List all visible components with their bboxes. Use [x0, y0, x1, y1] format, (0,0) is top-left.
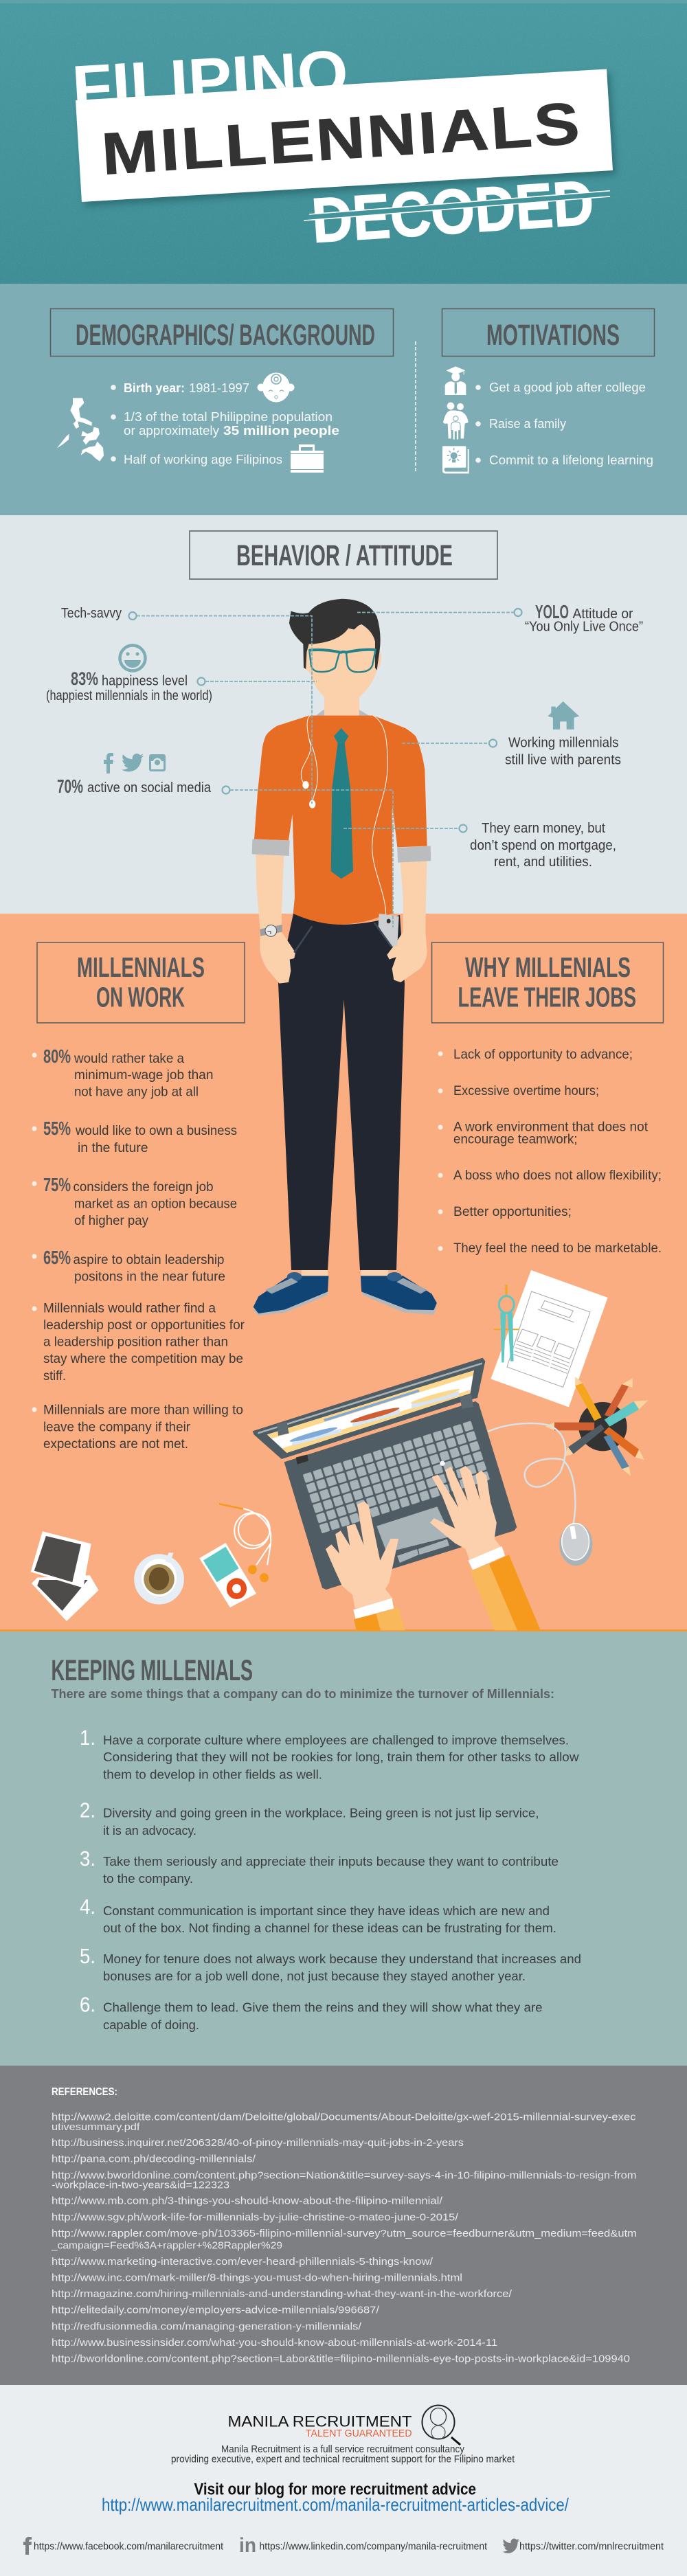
call to action: http://www.manilarecruitment.com/manila-recruitment-articles-advice/ — [102, 2494, 570, 2515]
social link: linkedin: in — [239, 2534, 256, 2557]
list: reasons for leaving: A boss who does not allow flexibility; — [453, 1168, 662, 1183]
icon: briefcase — [291, 444, 324, 473]
social link: facebook — [23, 2537, 223, 2555]
text: motivation 1: Get a good job after college — [489, 380, 646, 394]
heading: references: REFERENCES: — [52, 2086, 117, 2098]
list of reference links: http://www.mb.com.ph/3-things-you-should-know-about-the-filipino-millennial/ — [52, 2195, 443, 2206]
list: work statistic 65% — [32, 1247, 225, 1285]
list: work statistic 65%: 65% — [43, 1247, 71, 1268]
list: leadership post: stiff. — [43, 1368, 66, 1383]
heading: millennials on work — [37, 942, 245, 1023]
tip 1: Have a corporate culture where employees are challenged to improve themselves. — [103, 1732, 569, 1748]
title word: Filipino: FILIPINO — [70, 37, 350, 124]
text: happiness level: happiness level — [102, 673, 188, 688]
title banner — [76, 69, 616, 206]
list: leadership post: stay where the competition may be — [43, 1351, 243, 1366]
list: work statistic 80%: would rather take a — [74, 1051, 184, 1066]
text: earn money: They earn money, but — [482, 821, 605, 836]
logo: Manila Recruitment — [228, 2406, 460, 2445]
company description: Manila Recruitment is a full service recruitment consultancy — [221, 2444, 465, 2455]
neck, face and hair — [289, 599, 383, 742]
tip 4: 4. — [80, 1895, 95, 1919]
icon: Philippines map — [57, 398, 104, 462]
list of reference links: http://www.sgv.ph/work-life-for-millennials-by-julie-christine-o-mateo-june-0-2015/ — [52, 2212, 459, 2223]
laptop base — [277, 1394, 517, 1590]
pencil cup — [545, 1377, 649, 1476]
list: work statistic 55%: 55% — [43, 1118, 71, 1139]
right hand — [430, 1466, 541, 1630]
text: social media — [57, 776, 212, 797]
text: YOLO: YOLO — [535, 601, 569, 622]
tip 3: Take them seriously and appreciate their inputs because they want to contribute — [103, 1854, 559, 1868]
logo: Manila Recruitment: MANILA RECRUITMENT — [228, 2413, 412, 2430]
text: live with parents: Working millennials — [508, 735, 618, 750]
tip 4: Constant communication is important since they have ideas which are new and — [103, 1903, 550, 1918]
text: tech-savvy: Tech-savvy — [61, 606, 122, 621]
list: work statistic 75% — [32, 1174, 237, 1228]
tip 2: 2. — [80, 1798, 95, 1822]
list: reasons for leaving: encourage teamwork; — [453, 1132, 577, 1147]
callout leader lines — [129, 609, 522, 927]
list of reference links: _campaign=Feed%3A+rappler+%28Rappler%29 — [51, 2239, 282, 2252]
tip 2: it is an advocacy. — [103, 1823, 196, 1838]
heading: behavior — [190, 531, 497, 579]
list of reference links: http://elitedaily.com/money/employers-advice-millennials/996687/ — [52, 2304, 380, 2316]
arms, shirt, tie and accessories — [252, 716, 431, 984]
icon: book with light bulb — [442, 446, 469, 473]
tip 6: 6. — [80, 1992, 95, 2017]
text: happiness level — [46, 668, 212, 703]
left hand — [326, 1502, 405, 1630]
text: population — [111, 409, 339, 438]
text: population: 35 million people — [223, 423, 339, 438]
panel: millennials at work — [0, 914, 687, 1631]
list of reference links: http://www.businessinsider.com/what-you-should-know-about-millennials-at-work-2014-11 — [52, 2337, 497, 2349]
heading: millennials on work: MILLENNIALS — [77, 951, 205, 983]
shoes — [254, 1270, 437, 1315]
icons: social media — [104, 753, 166, 773]
icon: baby — [257, 372, 294, 403]
social link: facebook: https://www.facebook.com/manilarecruitment — [34, 2542, 223, 2553]
list: reasons for leaving — [438, 1047, 662, 1256]
list: work statistic 80% — [32, 1046, 213, 1099]
earphones — [301, 716, 387, 915]
text: happiness level: (happiest millennials in the world) — [46, 688, 212, 703]
list: work statistic 55%: in the future — [78, 1140, 148, 1155]
panel: title header — [0, 0, 687, 284]
list: leadership post: a leadership position rather than — [43, 1334, 228, 1349]
list: leadership post — [32, 1301, 245, 1383]
list of reference links: http://redfusionmedia.com/managing-generation-y-millennials/ — [52, 2320, 362, 2333]
call to action — [102, 2480, 570, 2515]
tip 4: out of the box. Not finding a channel for these ideas can be frustrating for them. — [103, 1921, 556, 1935]
list of reference links: utivesummary.pdf — [52, 2121, 140, 2133]
list of reference links: http://rmagazine.com/hiring-millennials-and-understanding-what-they-want-in-the-workforce/ — [52, 2288, 513, 2300]
heading: millennials on work: ON WORK — [96, 981, 185, 1013]
illustration: man — [252, 599, 437, 1315]
tip 5 — [80, 1944, 581, 1983]
tip 5: bonuses are for a job well done, not just because they stayed another year. — [103, 1969, 526, 1983]
icon: house — [548, 701, 579, 730]
list: reasons for leaving: Excessive overtime hours; — [453, 1083, 599, 1098]
list: work statistic 55% — [32, 1118, 237, 1155]
list of reference links: http://www.bworldonline.com/content.php?section=Nation&title=survey-says-4-in-10-filipino-millennials-to-resign-from — [52, 2169, 637, 2182]
text: live with parents: still live with parents — [505, 753, 621, 768]
text: YOLO: “You Only Live Once” — [525, 620, 643, 635]
list of reference links: http://www.rappler.com/move-ph/103365-filipino-millennial-survey?utm_source=feedburner&utm_medium=feed&utm — [52, 2228, 637, 2239]
list: reasons for leaving: Lack of opportunity to advance; — [453, 1047, 633, 1062]
tip 1: 1. — [80, 1726, 95, 1750]
panel: demographics and motivations — [0, 284, 687, 515]
list: work statistic 80%: minimum-wage job than — [74, 1067, 213, 1083]
list: reasons for leaving: Better opportunities; — [453, 1204, 572, 1219]
tip 4 — [80, 1895, 556, 1935]
text: live with parents — [505, 735, 621, 768]
tip 5: Money for tenure does not always work because they understand that increases and — [103, 1952, 581, 1966]
text: birth year — [111, 381, 249, 395]
list: work statistic 65%: aspire to obtain leadership — [73, 1252, 225, 1267]
icon: smiley — [120, 646, 146, 670]
list: work statistic 75%: of higher pay — [74, 1213, 148, 1228]
illustration: photos, coffee and music player — [31, 1504, 271, 1621]
text: population: 1/3 of the total Philippine population — [124, 409, 333, 424]
text: motivation 3: Commit to a lifelong learning — [489, 453, 653, 467]
icon: family — [443, 403, 469, 440]
list of reference links: http://pana.com.ph/decoding-millennials/ — [52, 2153, 256, 2165]
text: earn money: don’t spend on mortgage, — [470, 838, 616, 853]
trousers — [278, 914, 405, 1270]
tip 2 — [80, 1798, 539, 1838]
heading: demographics: DEMOGRAPHICS/ BACKGROUND — [76, 319, 375, 352]
list: work statistic 75%: 75% — [43, 1174, 71, 1195]
logo: Manila Recruitment: TALENT GUARANTEED — [306, 2428, 412, 2439]
list: willing to leave — [32, 1403, 243, 1451]
text: YOLO — [525, 601, 643, 635]
illustration: laptop, hands, mouse and pencils — [253, 1358, 649, 1630]
text: population: or approximately — [124, 423, 220, 438]
list of reference links: -workplace-in-two-years&id=122323 — [52, 2179, 229, 2191]
list: work statistic 80%: not have any job at all — [74, 1084, 199, 1099]
glasses — [309, 650, 376, 672]
illustration: paper with wireframe and compass — [491, 1270, 608, 1407]
company description: providing executive, expert and technical recruitment support for the Filipino market — [171, 2454, 515, 2465]
call to action: Visit our blog for more recruitment advice — [194, 2480, 476, 2499]
list: leadership post: leadership post or opportunities for — [43, 1318, 245, 1333]
icon: graduate — [445, 366, 466, 395]
panel: references — [0, 2066, 687, 2385]
social link: linkedin: https://www.linkedin.com/company/manila-recruitment — [260, 2542, 487, 2553]
text: earn money — [470, 821, 616, 870]
text: social media: 70% — [57, 776, 83, 797]
list of reference links: http://www2.deloitte.com/content/dam/Deloitte/global/Documents/About-Deloitte/gx-wef-2015-millennial-survey-exec — [52, 2112, 636, 2123]
text: birth year: Birth year: — [124, 381, 185, 395]
tip 3: 3. — [80, 1846, 95, 1871]
heading: motivations: MOTIVATIONS — [486, 319, 620, 352]
text: happiness level: 83% — [71, 668, 98, 689]
list of reference links: http://www.inc.com/mark-miller/8-things-you-must-do-when-hiring-millennials.html — [52, 2272, 462, 2283]
panel: keeping millennials — [0, 1631, 687, 2066]
list: reasons for leaving: They feel the need to be marketable. — [453, 1241, 662, 1256]
list: work statistic 80%: 80% — [43, 1046, 71, 1067]
tip 1: them to develop in other fields as well. — [103, 1767, 322, 1782]
heading: behavior: BEHAVIOR / ATTITUDE — [236, 540, 453, 572]
text: motivation 2: Raise a family — [489, 416, 567, 431]
list: willing to leave: expectations are not met. — [43, 1436, 188, 1451]
text: birth year: 1981-1997 — [189, 381, 249, 395]
list of reference links: http://bworldonline.com/content.php?section=Labor&title=filipino-millennials-eye-top-posts-in-workplace&id=109940 — [52, 2353, 630, 2364]
panel: behavior and attitude — [0, 515, 687, 914]
list of reference links: http://www.marketing-interactive.com/ever-heard-phillennials-5-things-know/ — [52, 2256, 433, 2268]
text: social media: active on social media — [87, 780, 212, 795]
list of reference links: http://business.inquirer.net/206328/40-of-pinoy-millennials-may-quit-jobs-in-2-years — [52, 2137, 464, 2149]
tip 1 — [80, 1726, 579, 1782]
heading: demographics — [51, 309, 393, 356]
mouse — [559, 1523, 592, 1566]
heading: keeping millennials: KEEPING MILLENIALS — [51, 1655, 253, 1687]
text: working age: Half of working age Filipinos — [124, 452, 282, 466]
title word: Decoded, struck through: DECODED — [310, 168, 596, 256]
tip 6: capable of doing. — [103, 2018, 199, 2032]
list: work statistic 55%: would like to own a business — [75, 1123, 237, 1138]
tip 5: 5. — [80, 1944, 95, 1968]
social link: twitter — [503, 2538, 664, 2553]
heading: motivations — [442, 309, 654, 356]
list: willing to leave: leave the company if their — [43, 1419, 190, 1434]
list: willing to leave: Millennials are more than willing to — [43, 1403, 243, 1418]
list: work statistic 75%: considers the foreign job — [73, 1179, 214, 1195]
text: earn money: rent, and utilities. — [494, 855, 592, 870]
tip 6: Challenge them to lead. Give them the reins and they will show what they are — [103, 2000, 543, 2014]
tip 1: Considering that they will not be rookies for long, train them for other tasks to allow — [103, 1750, 579, 1764]
tip 3 — [80, 1846, 559, 1886]
heading: why millennials leave — [431, 942, 664, 1023]
text: YOLO: Attitude or — [573, 607, 633, 622]
tip 6 — [80, 1992, 543, 2032]
list of reference links — [51, 2112, 637, 2364]
list: work statistic 65%: positons in the near future — [74, 1269, 225, 1285]
laptop lid — [253, 1358, 485, 1459]
social link: linkedin — [239, 2534, 487, 2557]
list: work statistic 75%: market as an option because — [74, 1197, 237, 1212]
title word: Millennials: MILLENNIALS — [100, 90, 584, 188]
list: reasons for leaving: A work environment that does not — [453, 1120, 649, 1135]
list: leadership post: Millennials would rather find a — [43, 1301, 216, 1316]
tip 2: Diversity and going green in the workplace. Being green is not just lip service, — [103, 1805, 539, 1820]
company description — [171, 2444, 515, 2465]
social link: twitter: https://twitter.com/mnlrecruitment — [519, 2542, 664, 2553]
panel: footer — [0, 2385, 687, 2576]
subtitle: There are some things that a company can do to minimize the turnover of Millennials: — [51, 1686, 554, 1701]
tip 3: to the company. — [103, 1871, 193, 1886]
